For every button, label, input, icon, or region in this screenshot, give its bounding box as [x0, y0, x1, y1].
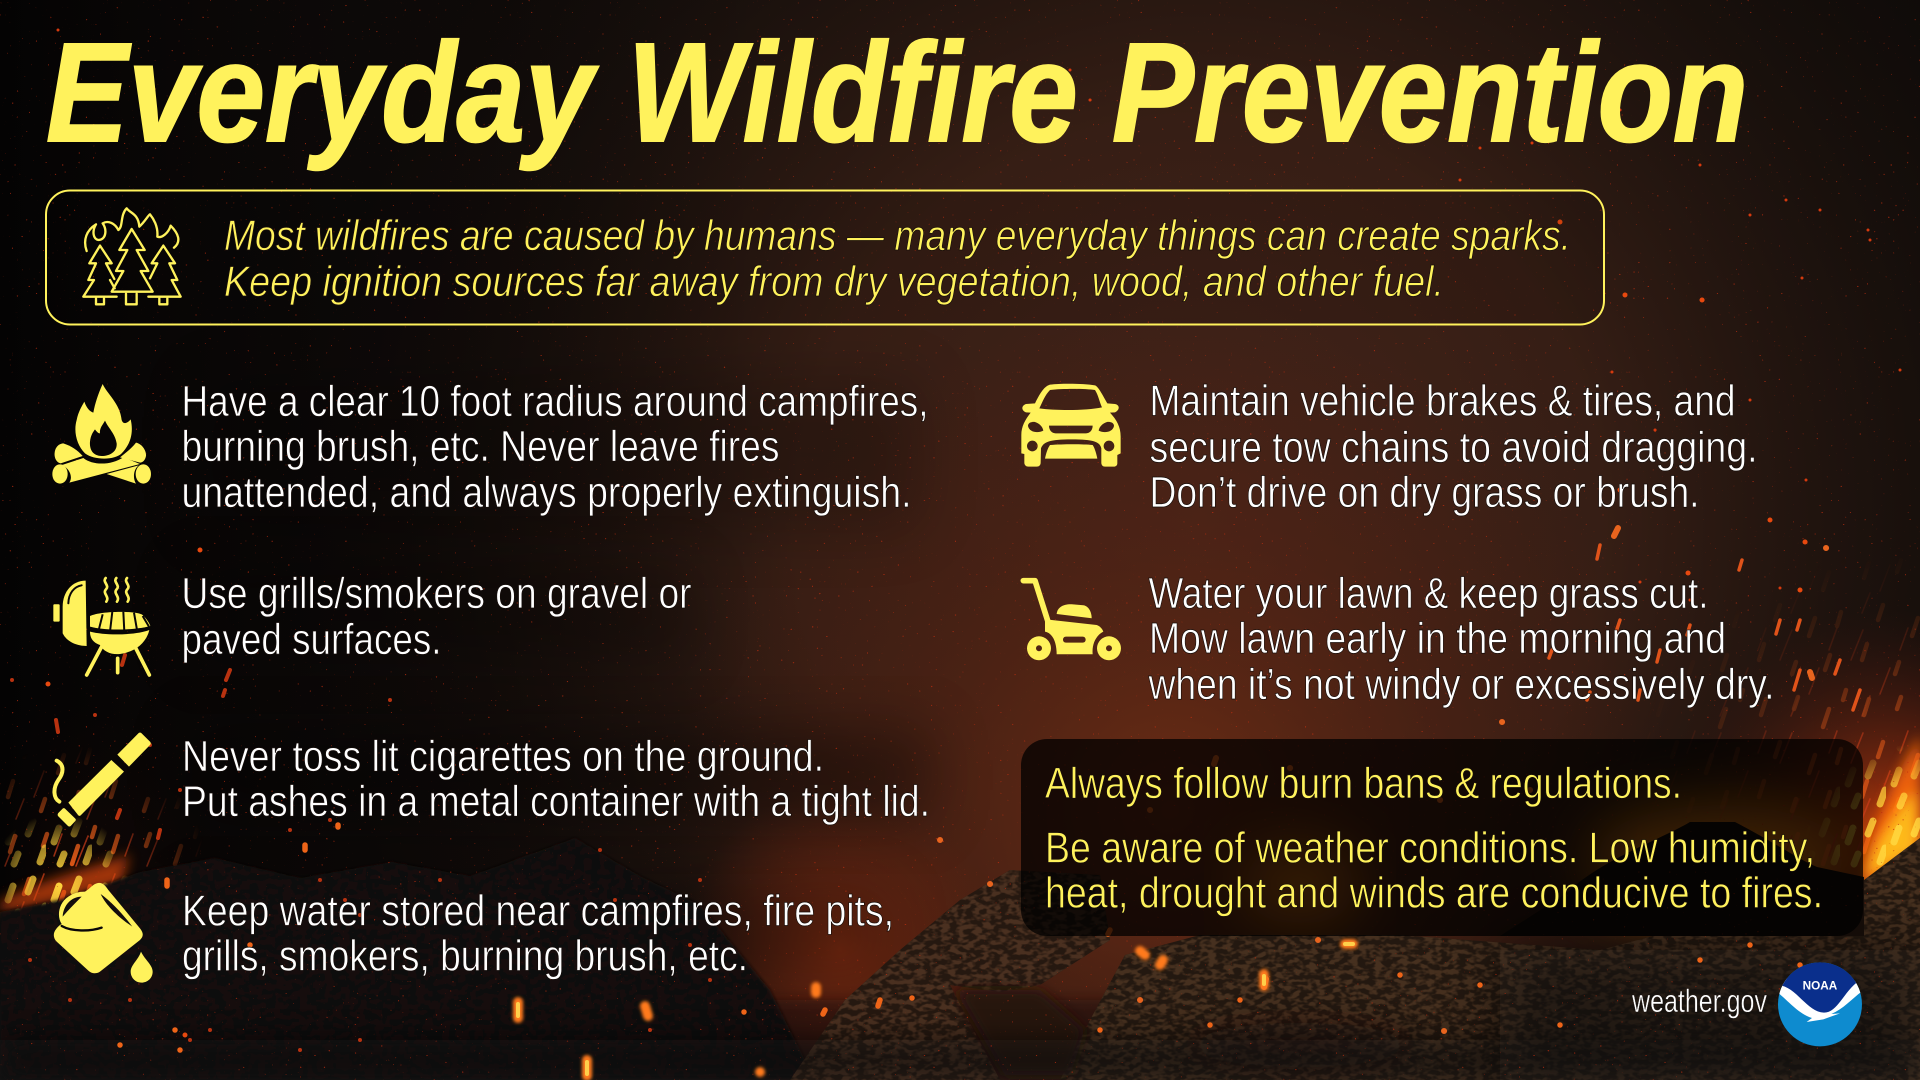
- icon: grill: [53, 578, 150, 675]
- callout text: [1045, 759, 1823, 918]
- text: campfires: [182, 377, 928, 517]
- icon: NOAA logo: [1778, 962, 1862, 1046]
- text: vehicles: Don’t drive on dry grass or brush.: [1150, 468, 1700, 517]
- intro text: [224, 212, 1571, 306]
- icon: water bucket: [54, 883, 153, 983]
- text: grills: paved surfaces.: [182, 615, 442, 664]
- text: lawn: Water your lawn & keep grass cut.: [1148, 569, 1708, 618]
- panel: burn bans callout: [1021, 739, 1863, 936]
- callout text: Always follow burn bans & regulations.: [1045, 759, 1682, 808]
- text: water: [182, 886, 894, 980]
- intro text: Keep ignition sources far away from dry vegetation, wood, and other fuel.: [224, 258, 1444, 306]
- text: campfires: unattended, and always properly extinguish.: [182, 468, 912, 517]
- text: weather.gov: weather.gov: [1631, 983, 1767, 1019]
- icon: burning trees: [83, 208, 181, 304]
- text: cigarettes: Put ashes in a metal container with a tight lid.: [182, 777, 930, 826]
- text: grills: Use grills/smokers on gravel or: [182, 569, 692, 618]
- intro text: Most wildfires are caused by humans — many everyday things can create sparks.: [224, 212, 1571, 260]
- text: cigarettes: [182, 732, 930, 826]
- text: vehicles: Maintain vehicle brakes & tires, and: [1150, 376, 1736, 426]
- text: water: grills, smokers, burning brush, etc.: [182, 932, 748, 980]
- text: cigarettes: Never toss lit cigarettes on the ground.: [182, 732, 824, 781]
- icon: car: [1021, 384, 1121, 467]
- text: lawn: when it’s not windy or excessively dry.: [1148, 660, 1774, 709]
- icon: NOAA logo: NOAA: [1803, 978, 1838, 992]
- text: lawn: [1148, 569, 1774, 709]
- text: grills: [182, 569, 692, 664]
- text: campfires: burning brush, etc. Never leave fires: [182, 422, 780, 471]
- text: vehicles: secure tow chains to avoid dragging.: [1150, 423, 1758, 472]
- text: vehicles: [1150, 376, 1758, 517]
- icon: campfire: [52, 384, 151, 484]
- icon: lawn mower: [1023, 581, 1121, 660]
- text: lawn: Mow lawn early in the morning and: [1149, 614, 1726, 663]
- text: water: Keep water stored near campfires, fire pits,: [182, 886, 894, 936]
- icon: cigarette: [54, 733, 151, 826]
- panel: intro callout: [46, 190, 1604, 324]
- text: campfires: Have a clear 10 foot radius around campfires,: [182, 377, 928, 426]
